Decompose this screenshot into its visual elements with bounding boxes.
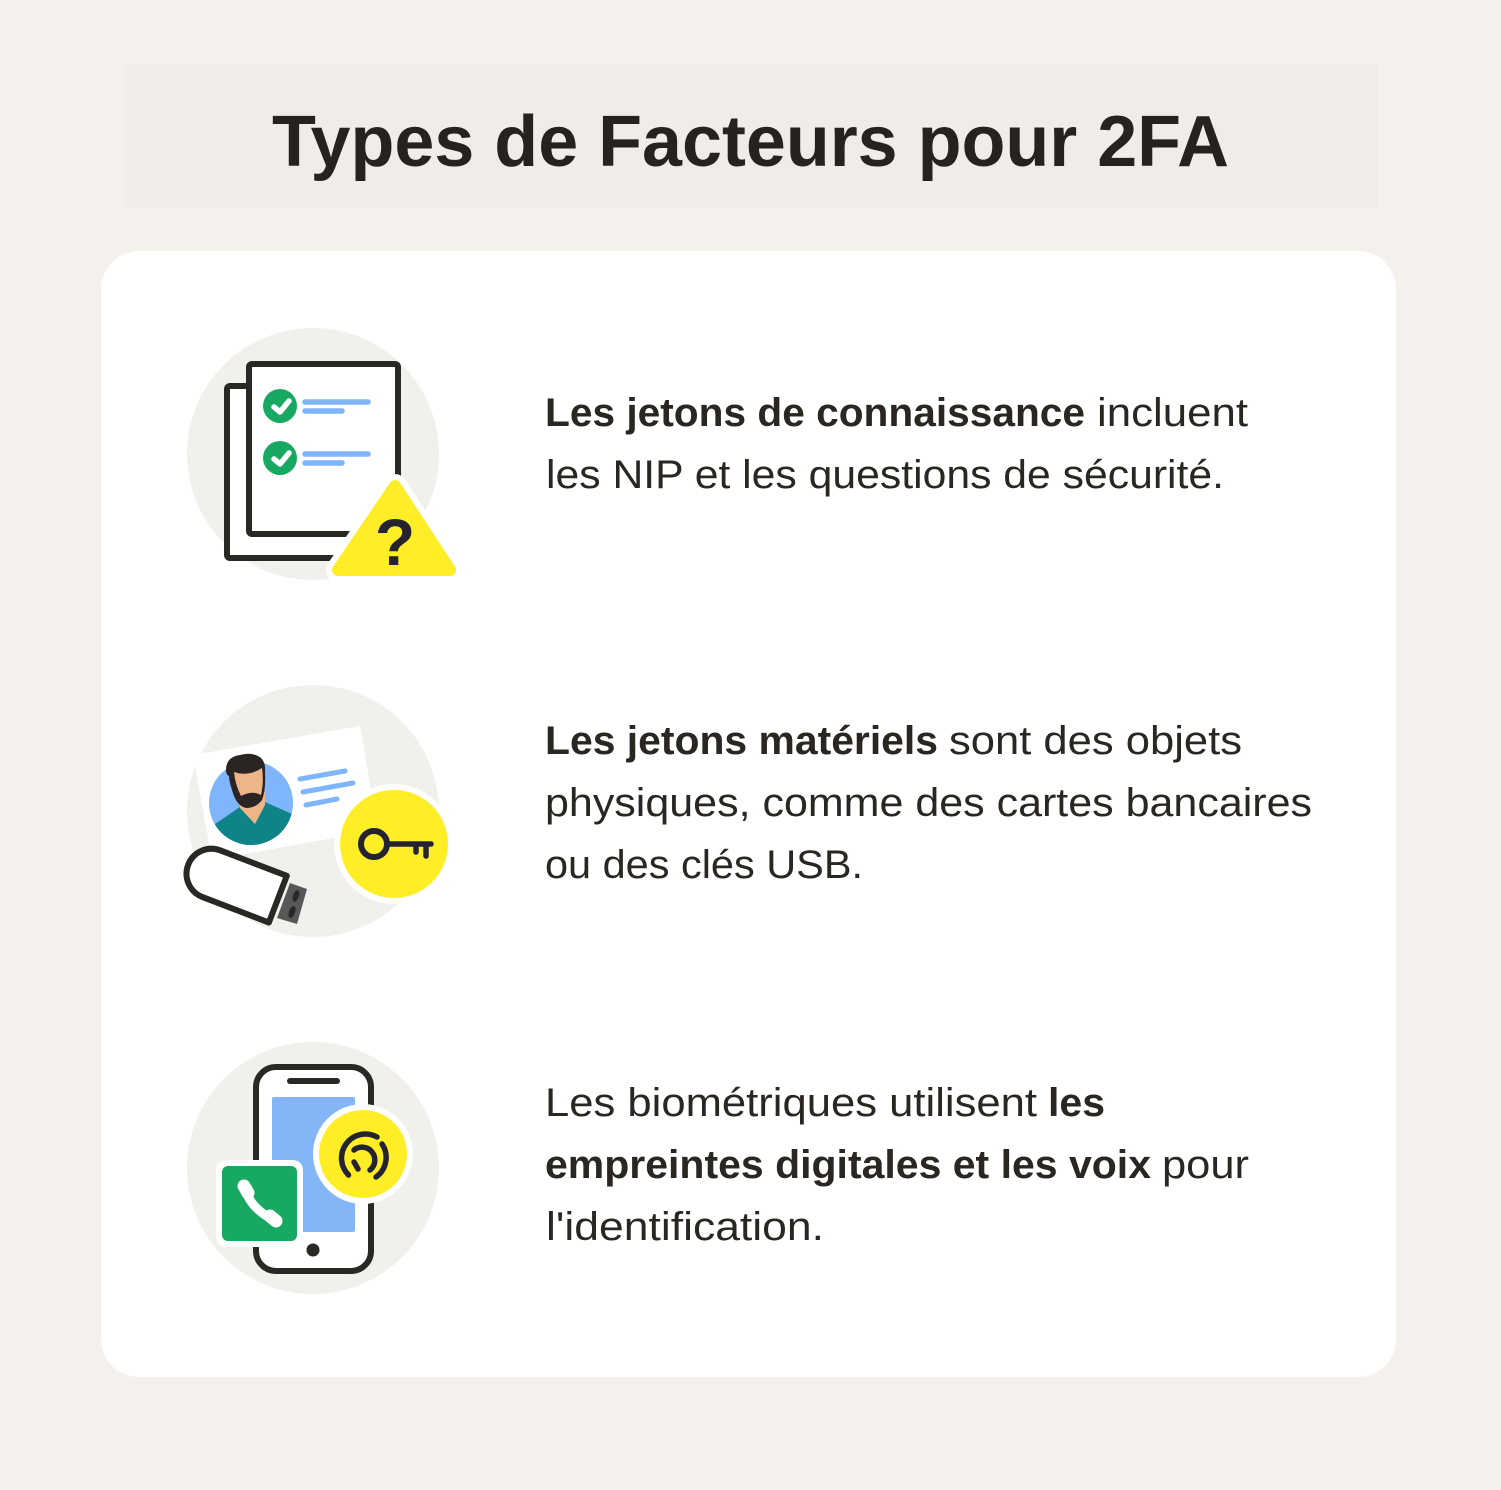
text: hardware tokens: sont des objets <box>949 719 1242 763</box>
header band <box>124 64 1378 208</box>
panel: white card <box>101 251 1396 1377</box>
text: hardware tokens: ou des clés USB. <box>545 843 863 887</box>
text: knowledge tokens: Les jetons de connaissance <box>545 391 1085 435</box>
text: biometrics: pour <box>1162 1143 1249 1187</box>
text: biometrics <box>545 1081 1249 1249</box>
title: Types de Facteurs pour 2FA <box>272 102 1229 182</box>
icon: documents with warning <box>187 328 450 580</box>
text: biometrics: empreintes digitales et les voix <box>545 1143 1151 1187</box>
icon: documents with warning: ? <box>375 505 415 579</box>
text: knowledge tokens: incluent <box>1097 391 1248 435</box>
text: hardware tokens <box>545 719 1312 887</box>
icon: ID card, key and USB <box>179 685 454 937</box>
text: knowledge tokens <box>545 391 1248 497</box>
text: biometrics: Les biométriques utilisent <box>545 1081 1037 1125</box>
icon: phone, fingerprint and call <box>187 1042 439 1294</box>
text: biometrics: l'identification. <box>546 1205 824 1249</box>
text: biometrics: les <box>1048 1081 1105 1125</box>
text: knowledge tokens: les NIP et les questions de sécurité. <box>546 453 1224 497</box>
text: hardware tokens: Les jetons matériels <box>545 719 938 763</box>
text: hardware tokens: physiques, comme des cartes bancaires <box>545 781 1312 825</box>
